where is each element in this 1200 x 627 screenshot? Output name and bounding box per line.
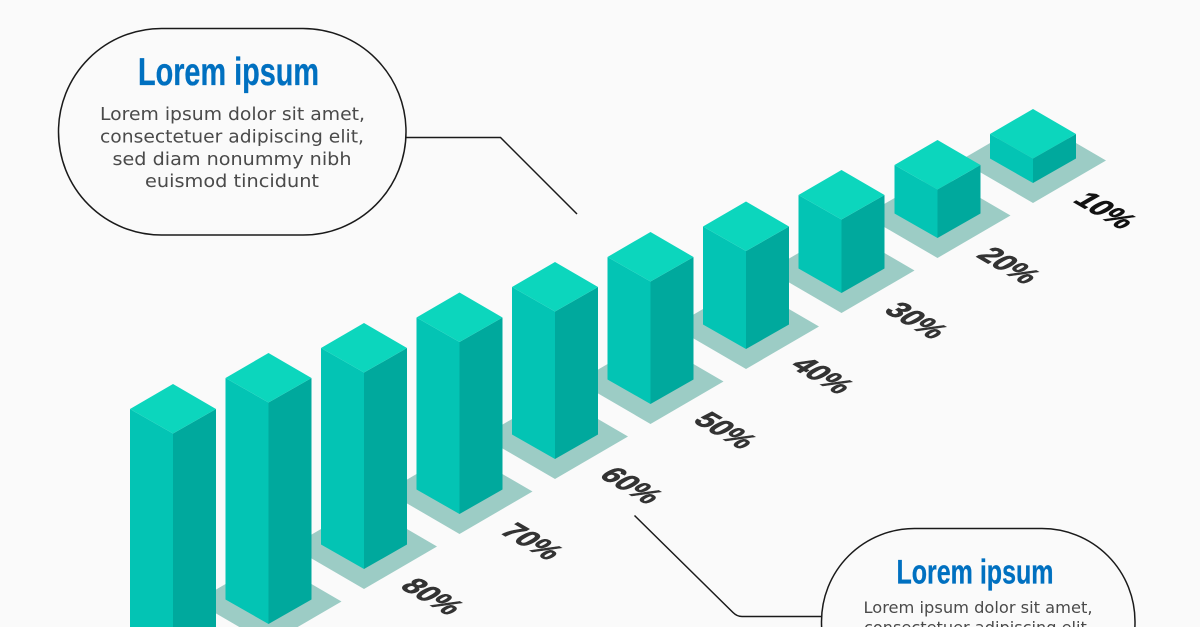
callout outline [58, 28, 406, 235]
bar 80% [291, 323, 437, 589]
bar 10% [960, 109, 1106, 203]
label 10%: 10% [1066, 188, 1144, 233]
label 60%: 60% [592, 463, 670, 508]
bar 20% [864, 140, 1010, 258]
label 30%: 30% [877, 298, 955, 343]
callout heading: Lorem ipsum [138, 51, 319, 94]
bar 60% [482, 262, 628, 479]
bar 30% [768, 170, 914, 313]
callout text [100, 105, 365, 192]
bar 40% [673, 202, 819, 369]
callout: bottom right [634, 516, 1135, 627]
callout outline [822, 528, 1135, 627]
bar 50% [578, 232, 724, 424]
bar 70% [386, 292, 532, 534]
callout text: Lorem ipsum dolor sit amet, [100, 105, 365, 125]
callout text: consectetuer adipiscing elit, [100, 128, 364, 148]
bar chart [130, 109, 1106, 627]
callout text: euismod tincidunt [145, 172, 319, 192]
callout text [864, 598, 1092, 627]
label 50%: 50% [686, 408, 764, 453]
callout text: Lorem ipsum dolor sit amet, [864, 598, 1092, 617]
callout: top left [58, 28, 577, 235]
callout text: sed diam nonummy nibh [112, 150, 352, 170]
leader line [406, 138, 577, 214]
label 20%: 20% [969, 243, 1048, 288]
label 70%: 70% [492, 519, 571, 564]
leader line [634, 516, 822, 616]
label 80%: 80% [393, 574, 471, 619]
bar 90% [196, 353, 342, 627]
label 40%: 40% [783, 353, 861, 398]
bar 100% [130, 384, 216, 627]
callout heading: Lorem ipsum [896, 554, 1054, 592]
